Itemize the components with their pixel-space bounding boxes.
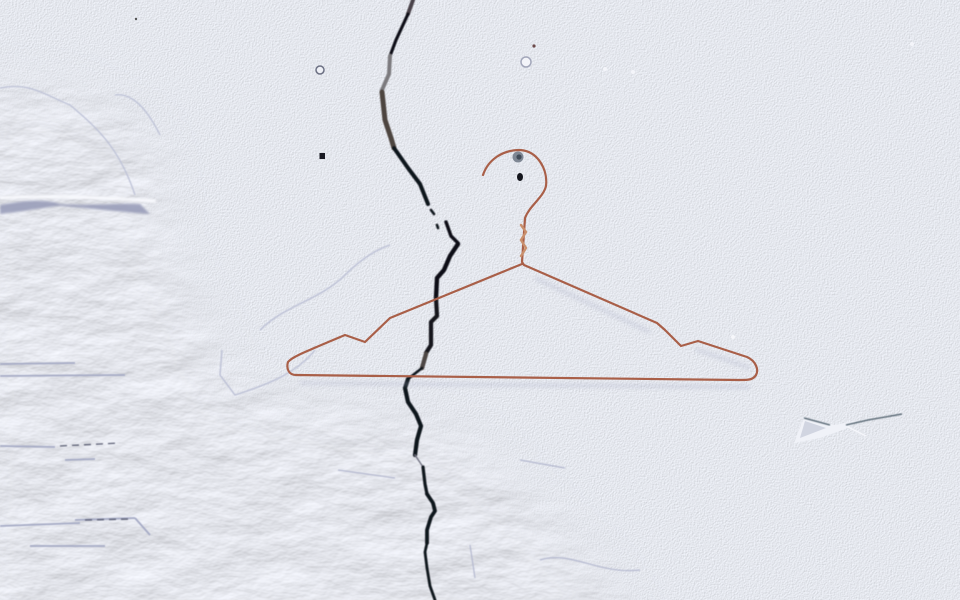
hanger shadow [300,278,750,387]
wall screw [512,152,524,181]
copper wire hanger [287,150,757,380]
paint chip on right [794,414,902,443]
plaster: textured white area lower left [0,81,640,600]
specks and holes [135,18,914,339]
crack in wall [382,0,458,600]
